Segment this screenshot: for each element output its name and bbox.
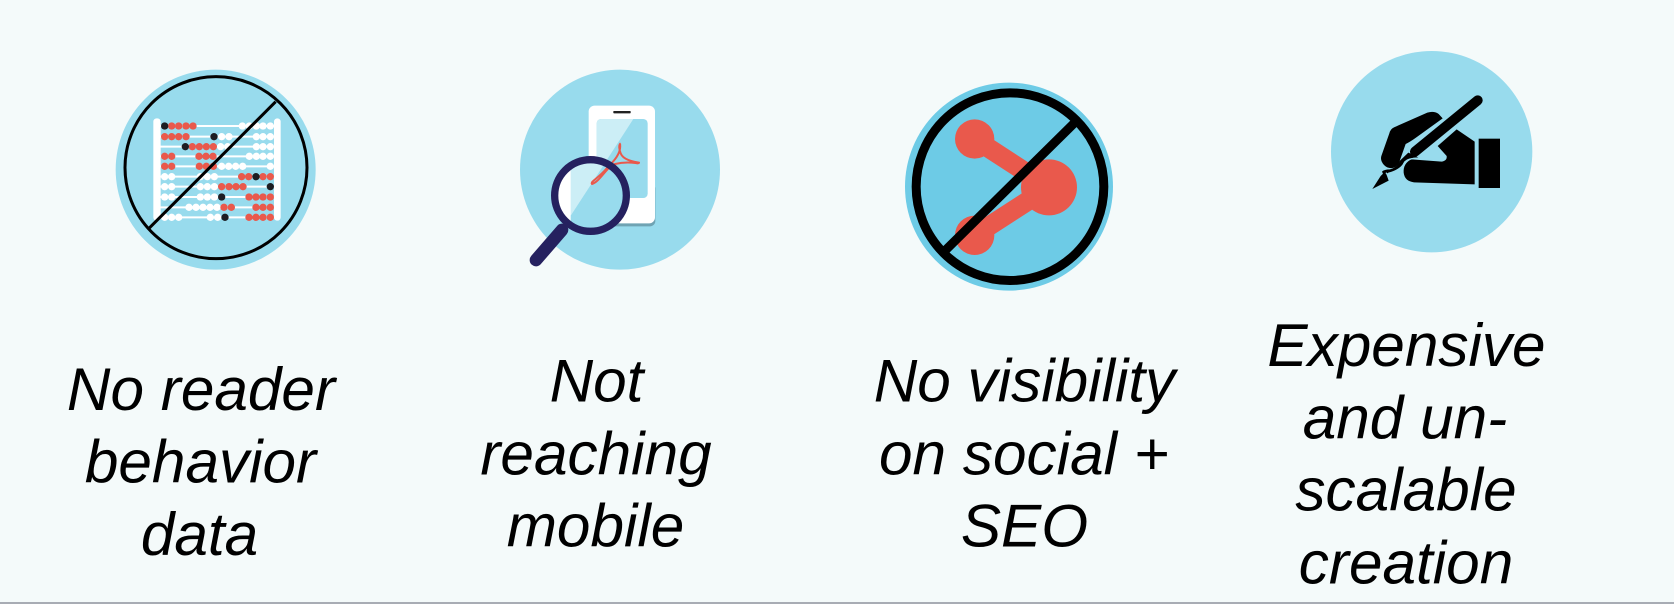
label: expensive and unscalable creation: creation — [1299, 528, 1513, 596]
label: not reaching mobile — [480, 347, 712, 560]
icon: phone with PDF under magnifying glass — [520, 70, 720, 270]
label: no visibility on social and SEO: on social + — [879, 419, 1169, 487]
label: no visibility on social and SEO: No visibility — [874, 347, 1179, 415]
label: no reader behavior data: behavior — [85, 428, 319, 496]
label: no reader behavior data: No reader — [67, 355, 338, 423]
label: expensive and unscalable creation: Expensive — [1267, 311, 1546, 379]
label: expensive and unscalable creation: and un- — [1303, 383, 1507, 451]
icon: crossed-out share symbol — [905, 83, 1113, 291]
icon: hand writing with pen — [1331, 51, 1532, 252]
label: not reaching mobile: Not — [550, 347, 646, 415]
label: no reader behavior data — [67, 355, 338, 568]
label: expensive and unscalable creation — [1267, 311, 1546, 596]
label: not reaching mobile: reaching — [480, 419, 712, 487]
panel: not reaching mobile — [480, 70, 720, 560]
panel: no reader behavior data — [67, 70, 338, 568]
label: not reaching mobile: mobile — [507, 492, 684, 560]
label: no visibility on social and SEO — [874, 347, 1179, 560]
panel: expensive and unscalable creation — [1267, 51, 1546, 596]
panel: no visibility on social and SEO — [874, 83, 1179, 560]
label: no reader behavior data: data — [141, 500, 258, 568]
label: no visibility on social and SEO: SEO — [961, 492, 1088, 560]
label: expensive and unscalable creation: scalable — [1295, 456, 1517, 524]
icon: crossed-out abacus — [116, 70, 316, 270]
